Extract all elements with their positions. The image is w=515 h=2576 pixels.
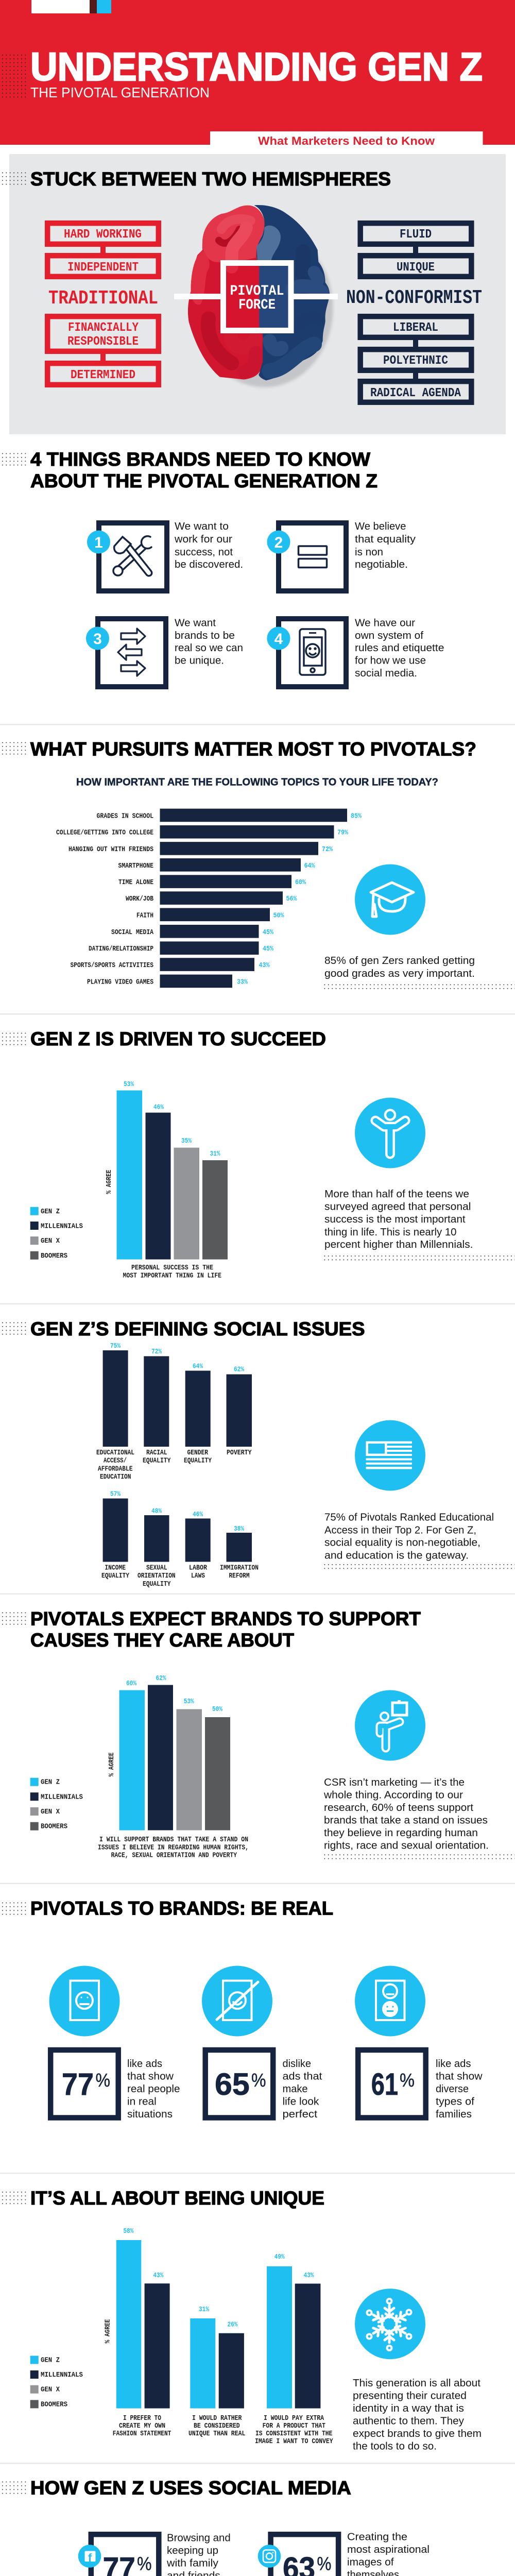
bar chart: more issues: EQUALITY (143, 1580, 171, 1588)
callout text: 85% of gen Zers ranked getting (324, 955, 475, 967)
bar chart: personal success: PERSONAL SUCCESS IS THE (131, 1264, 213, 1272)
stat: instagram 63%: Creating the (347, 2532, 407, 2543)
bar chart: top issues: AFFORDABLE (98, 1465, 133, 1473)
stat: 61% diverse families (355, 1966, 483, 2120)
callout text (324, 1189, 515, 1263)
icon: tablet with face (70, 1980, 99, 2020)
bar chart: topics: SPORTS/SPORTS ACTIVITIES (70, 961, 153, 970)
section: being unique (2, 2188, 482, 2452)
bar chart: top issues: RACIAL (146, 1449, 167, 1457)
icon: smartphone selfie (300, 629, 325, 675)
card 4: rules and etiquette (355, 642, 444, 654)
bar chart: topics: 45% (263, 928, 273, 937)
legend (30, 1778, 83, 1831)
traditional traits column: INDEPENDENT (67, 261, 139, 275)
tagline: What Marketers Need to Know (258, 134, 435, 147)
bar chart: more issues: INCOME (105, 1564, 126, 1572)
bar chart: topics: TIME ALONE (118, 878, 153, 887)
callout text: Access in their Top 2. For Gen Z, (324, 1525, 476, 1536)
bar chart: uniqueness: % AGREE (104, 2319, 112, 2343)
stat: instagram 63%: most aspirational (347, 2544, 430, 2555)
callout text (324, 1512, 515, 1571)
stat: instagram 63% (258, 2532, 430, 2576)
bar chart: top issues: EDUCATION (100, 1473, 131, 1481)
legend: GEN Z (41, 1778, 60, 1787)
bar chart: topics: WORK/JOB (126, 895, 153, 903)
pivotal force callout: PIVOTAL (230, 283, 284, 299)
card 2: We believe (355, 521, 406, 532)
legend: GEN X (41, 2386, 60, 2394)
icon: person with sign (355, 1690, 425, 1761)
heading: PIVOTALS EXPECT BRANDS TO SUPPORT (30, 1608, 421, 1629)
bar chart: uniqueness: 43% (153, 2272, 164, 2280)
stat: 77% real people: situations (127, 2109, 173, 2120)
section: support causes (2, 1608, 515, 1862)
bar chart: more issues: SEXUAL (146, 1564, 167, 1572)
legend: GEN Z (41, 2356, 60, 2364)
panel: stuck between two hemispheres (2, 154, 506, 434)
heading: STUCK BETWEEN TWO HEMISPHERES (30, 168, 391, 190)
stat: 65% perfect life: 65 (215, 2067, 250, 2102)
callout text (323, 1777, 515, 1862)
bar chart: top issues: ACCESS/ (104, 1457, 127, 1465)
heading: GEN Z’S DEFINING SOCIAL ISSUES (30, 1318, 365, 1340)
bar chart: topics: 56% (286, 895, 297, 903)
bar chart: brand support: ISSUES I BELIEVE IN REGARDING HUMAN RIGHTS, (98, 1843, 249, 1852)
legend: MILLENNIALS (41, 1222, 83, 1230)
stat: 77% real people: that show (127, 2071, 174, 2082)
callout text: research, 60% of teens support (324, 1802, 473, 1814)
stat: 65% perfect life: make (282, 2083, 308, 2095)
section: be real (2, 1898, 483, 2120)
legend: BOOMERS (41, 1823, 67, 1831)
bar chart: more issues (101, 1490, 259, 1588)
bar chart: topics: 64% (304, 862, 315, 870)
non-conformist traits column (346, 223, 482, 402)
bar chart: personal success: MOST IMPORTANT THING IN LIFE (123, 1272, 221, 1280)
traditional traits column: DETERMINED (71, 368, 135, 382)
stat: 61% diverse families: % (400, 2070, 415, 2091)
legend: BOOMERS (41, 2400, 67, 2409)
legend: MILLENNIALS (41, 2371, 83, 2379)
bar chart: uniqueness: 58% (123, 2227, 134, 2235)
bar chart: top issues: 62% (234, 1365, 244, 1374)
callout text: This generation is all about (353, 2378, 480, 2389)
stat: instagram 63%: % (317, 2553, 332, 2574)
section: driven to succeed (2, 1028, 515, 1280)
section: social media (2, 2477, 430, 2576)
card 3: be unique. (175, 655, 224, 667)
legend: GEN Z (41, 1208, 60, 1216)
traditional traits column: RESPONSIBLE (67, 335, 139, 349)
card 1 (87, 521, 243, 591)
bar chart: uniqueness: FASHION STATEMENT (113, 2430, 171, 2438)
bar chart: brand support (98, 1674, 249, 1859)
icon: arrows (118, 629, 145, 676)
stat: facebook 77%: keeping up (167, 2545, 218, 2556)
stat: facebook 77%: with family (166, 2557, 218, 2569)
stat: 77% real people: in real (127, 2096, 157, 2108)
bar chart: more issues: 57% (110, 1490, 121, 1498)
bar chart: topics: DATING/RELATIONSHIP (89, 945, 153, 953)
icon: crossed out tablet (217, 1980, 258, 2020)
card 4: 4 (274, 631, 283, 648)
callout text: More than half of the teens we (324, 1189, 469, 1200)
callout text: they believe in regarding human (324, 1827, 478, 1839)
traditional traits column: HARD WORKING (64, 228, 142, 242)
card 4 (267, 617, 444, 687)
stat: 61% diverse families: like ads (436, 2058, 471, 2070)
card 3: 3 (93, 631, 102, 648)
bar chart: brand support: % AGREE (108, 1753, 116, 1776)
heading: ABOUT THE PIVOTAL GENERATION Z (30, 470, 377, 492)
bar chart: uniqueness: 31% (199, 2306, 209, 2314)
bar chart: top issues: 72% (151, 1348, 162, 1356)
bar chart: personal success: 46% (153, 1104, 164, 1112)
bar chart: more issues: 46% (193, 1511, 203, 1519)
stat: facebook 77% (78, 2532, 231, 2576)
legend: MILLENNIALS (41, 1793, 83, 1801)
non-conformist traits column: FLUID (400, 228, 432, 242)
card 4: social media. (355, 668, 417, 679)
title: UNDERSTANDING GEN Z (30, 45, 483, 89)
bar chart: topics: GRADES IN SCHOOL (97, 812, 153, 820)
heading (30, 449, 377, 492)
bar chart: topics: SMARTPHONE (118, 862, 153, 870)
callout text: thing in life. This is nearly 10 (324, 1227, 456, 1238)
heading: GEN Z IS DRIVEN TO SUCCEED (30, 1028, 326, 1049)
pivotal force callout (174, 263, 338, 331)
section: 4 things brands need to know (2, 449, 444, 687)
bar chart: topics: 72% (322, 845, 333, 854)
icon: tools (113, 536, 151, 575)
stat: 65% perfect life: % (251, 2070, 266, 2091)
bar chart: uniqueness: I WOULD RATHER (192, 2414, 242, 2422)
bar chart: top issues: EQUALITY (184, 1457, 212, 1465)
non-conformist traits column: UNIQUE (397, 261, 435, 275)
heading (30, 1608, 421, 1651)
bar chart: uniqueness (104, 2227, 333, 2446)
legend (30, 2355, 83, 2409)
stat: instagram 63%: images of (347, 2557, 394, 2568)
callout text: social equality is non-negotiable, (324, 1537, 480, 1549)
card 1: 1 (94, 534, 103, 551)
bar chart: more issues: 48% (151, 1507, 162, 1516)
header banner (0, 0, 515, 147)
icon: graduation cap (355, 865, 425, 935)
non-conformist traits column: LIBERAL (393, 321, 438, 335)
bar chart: uniqueness: UNIQUE THAN REAL (188, 2430, 245, 2438)
callout text (324, 955, 515, 992)
stat: 61% diverse families: 61 (371, 2067, 398, 2102)
stat: 77% real people: real people (127, 2083, 180, 2095)
stat: 77% real people (49, 1966, 180, 2120)
stat: 61% diverse families: families (436, 2109, 472, 2120)
callout text: the tools to do so. (353, 2441, 437, 2452)
bar chart: topics (56, 809, 362, 988)
heading: 4 THINGS BRANDS NEED TO KNOW (30, 449, 370, 470)
bar chart: topics: HANGING OUT WITH FRIENDS (68, 845, 153, 854)
section: what pursuits matter most (2, 739, 515, 992)
callout text: 75% of Pivotals Ranked Educational (324, 1512, 494, 1523)
callout text: rights, race and sexual orientation. (324, 1840, 489, 1852)
bar chart: more issues: LAWS (191, 1572, 205, 1580)
callout text (353, 2378, 482, 2452)
bar chart: topics: 43% (259, 961, 270, 970)
stat: 65% perfect life (202, 1966, 322, 2120)
bar chart: personal success: 35% (181, 1137, 192, 1145)
callout text: presenting their curated (353, 2390, 467, 2401)
icon: person with raised arms (355, 1097, 425, 1168)
bar chart: brand support: I WILL SUPPORT BRANDS THAT TAKE A STAND ON (99, 1836, 248, 1844)
stat: facebook 77%: Browsing and (167, 2532, 231, 2544)
illustration: paper brain (188, 205, 333, 387)
bar chart: top issues: POVERTY (227, 1449, 252, 1457)
bar chart: more issues: REFORM (229, 1572, 249, 1580)
bar chart: brand support: 50% (212, 1705, 222, 1714)
stat: 65% perfect life: ads that (282, 2071, 322, 2082)
card 1: success, not (175, 547, 233, 558)
bar chart: more issues: LABOR (189, 1564, 207, 1572)
card 3: brands to be (175, 630, 235, 641)
card 2: is non (355, 547, 383, 558)
bar chart: more issues: EQUALITY (101, 1572, 129, 1580)
bar chart: uniqueness: FOR A PRODUCT THAT (263, 2422, 325, 2430)
bar chart: top issues: EDUCATIONAL (96, 1449, 134, 1457)
bar chart: top issues: 75% (110, 1342, 121, 1350)
stat: 77% real people: 77 (62, 2067, 94, 2102)
bar chart: personal success (105, 1080, 228, 1280)
stat: 61% diverse families: types of (436, 2096, 474, 2108)
legend: BOOMERS (41, 1252, 67, 1260)
heading: HOW GEN Z USES SOCIAL MEDIA (30, 2477, 351, 2499)
card 4: We have our (355, 617, 415, 629)
stat: 77% real people: like ads (127, 2058, 162, 2070)
bar chart: topics: 60% (295, 878, 306, 887)
non-conformist traits column: RADICAL AGENDA (370, 386, 461, 400)
legend (30, 1207, 83, 1260)
card 3: We want (175, 617, 216, 629)
subtitle: THE PIVOTAL GENERATION (30, 84, 210, 100)
chart subheading: HOW IMPORTANT ARE THE FOLLOWING TOPICS TO YOUR LIFE TODAY? (76, 777, 438, 788)
callout text: and education is the gateway. (324, 1550, 469, 1561)
card 2: negotiable. (355, 559, 408, 570)
legend: GEN X (41, 1237, 60, 1245)
bar chart: brand support: 60% (126, 1680, 136, 1688)
bar chart: more issues: 38% (234, 1525, 244, 1533)
non-conformist traits column: POLYETHNIC (383, 354, 448, 368)
heading: WHAT PURSUITS MATTER MOST TO PIVOTALS? (30, 739, 476, 759)
card 3: real so we can (175, 642, 243, 654)
bar chart: personal success: 53% (124, 1080, 134, 1089)
bar chart: more issues: IMMIGRATION (220, 1564, 259, 1572)
bar chart: uniqueness: 26% (228, 2321, 238, 2329)
callout text: surveyed agreed that personal (324, 1201, 471, 1213)
section: social issues (2, 1318, 515, 1588)
pivotal force callout: FORCE (238, 297, 276, 313)
callout text: good grades as very important. (324, 968, 475, 979)
callout text: CSR isn’t marketing — it’s the (324, 1777, 465, 1788)
stat: 61% diverse families: diverse (436, 2083, 469, 2095)
icon: tablet with two faces (376, 1980, 405, 2020)
callout text: whole thing. According to our (323, 1789, 463, 1801)
bar chart: uniqueness: I WOULD PAY EXTRA (264, 2414, 324, 2422)
bar chart: topics: PLAYING VIDEO GAMES (87, 978, 153, 986)
card 2: that equality (355, 534, 416, 545)
bar chart: top issues: EQUALITY (143, 1457, 171, 1465)
icon: snowflake (355, 2289, 425, 2359)
traditional traits column: FINANCIALLY (68, 321, 139, 335)
icon: facebook (78, 2545, 101, 2568)
card 2 (267, 521, 416, 591)
bar chart: uniqueness: BE CONSIDERED (194, 2422, 240, 2430)
bar chart: more issues: ORIENTATION (138, 1572, 176, 1580)
bar chart: uniqueness: 49% (274, 2253, 285, 2261)
bar chart: uniqueness: 43% (304, 2272, 314, 2280)
card 1: We want to (175, 521, 229, 532)
card 3 (86, 617, 243, 687)
bar chart: topics: COLLEGE/GETTING INTO COLLEGE (56, 829, 153, 837)
bar chart: uniqueness: CREATE MY OWN (119, 2422, 165, 2430)
stat: 65% perfect life: perfect (282, 2109, 318, 2120)
bar chart: top issues: GENDER (187, 1449, 208, 1457)
card 1: be discovered. (175, 559, 243, 570)
stat: 77% real people: % (96, 2070, 110, 2091)
heading: CAUSES THEY CARE ABOUT (30, 1630, 294, 1651)
icon: flag (355, 1420, 425, 1491)
traditional traits column (47, 223, 159, 385)
bar chart: top issues: 64% (193, 1362, 203, 1370)
bar chart: brand support: RACE, SEXUAL ORIENTATION AND POVERTY (111, 1851, 237, 1859)
legend: GEN X (41, 1808, 60, 1816)
bar chart: brand support: 53% (184, 1698, 194, 1706)
stat: 61% diverse families: that show (436, 2071, 483, 2082)
bar chart: uniqueness: IS CONSISTENT WITH THE (255, 2430, 332, 2438)
bar chart: uniqueness: IMAGE I WANT TO CONVEY (255, 2437, 333, 2446)
bar chart: uniqueness: I PREFER TO (123, 2414, 161, 2422)
icon: equals (299, 546, 327, 568)
bar chart: personal success: 31% (210, 1150, 220, 1158)
bar chart: topics: SOCIAL MEDIA (111, 928, 153, 937)
callout text: expect brands to give them (353, 2428, 482, 2439)
bar chart: top issues (96, 1342, 252, 1481)
bar chart: topics: 33% (237, 978, 248, 986)
callout text: percent higher than Millennials. (324, 1239, 473, 1250)
stat: 65% perfect life: life look (282, 2096, 319, 2108)
card 4: for how we use (355, 655, 426, 667)
stat: 65% perfect life: dislike (282, 2058, 311, 2070)
stat: facebook 77%: % (137, 2553, 152, 2574)
bar chart: topics: 79% (337, 829, 348, 837)
icon: facebook: f (88, 2551, 92, 2564)
callout text: authentic to them. They (353, 2415, 464, 2427)
callout text: success is the most important (324, 1214, 466, 1225)
card 1: work for our (174, 534, 232, 545)
icon: instagram (258, 2545, 281, 2568)
bar chart: topics: 50% (273, 911, 284, 920)
bar chart: brand support: 62% (156, 1674, 166, 1683)
heading: IT’S ALL ABOUT BEING UNIQUE (30, 2188, 324, 2209)
card 4: own system of (355, 630, 423, 641)
bar chart: topics: 85% (351, 812, 362, 820)
card 2: 2 (274, 534, 283, 551)
non-conformist traits column: NON-CONFORMIST (346, 287, 482, 309)
bar chart: personal success: % AGREE (105, 1170, 113, 1194)
traditional traits column: TRADITIONAL (48, 287, 158, 310)
bar chart: topics: FAITH (136, 911, 153, 920)
callout text: brands that take a stand on issues (324, 1815, 488, 1826)
callout text: identity in a way that is (353, 2403, 464, 2414)
bar chart: topics: 45% (263, 945, 273, 953)
heading: PIVOTALS TO BRANDS: BE REAL (30, 1898, 333, 1919)
